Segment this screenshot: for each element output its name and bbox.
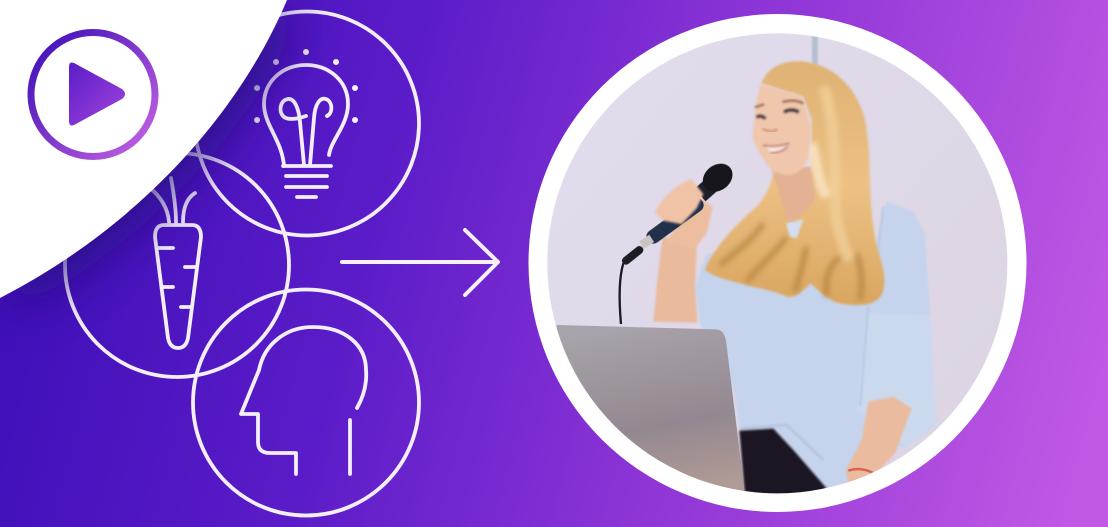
photo frame: white ring bbox=[528, 14, 1026, 512]
icon group: overlapping line circles bbox=[65, 12, 419, 516]
face bbox=[753, 84, 812, 175]
hair bbox=[705, 61, 884, 305]
circle: carrot bbox=[65, 153, 289, 377]
icon: lightbulb bbox=[257, 52, 355, 197]
icon: carrot bbox=[150, 178, 201, 348]
eyes and brows bbox=[755, 101, 803, 119]
circle: lightbulb bbox=[195, 12, 419, 236]
white corner panel bbox=[0, 0, 287, 298]
laptop bbox=[557, 325, 745, 497]
shirt collar bbox=[786, 219, 803, 238]
microphone bbox=[626, 158, 738, 261]
fingers bbox=[655, 179, 703, 224]
raised arm bbox=[653, 237, 697, 323]
icon: play button bbox=[31, 32, 155, 156]
shadow under white corner bbox=[14, 14, 301, 312]
trousers bbox=[739, 429, 827, 497]
shirt bbox=[695, 202, 937, 488]
nose shading bbox=[763, 128, 777, 131]
circle: head bbox=[193, 290, 419, 516]
photo: woman speaking into a microphone behind a laptop bbox=[540, 20, 1020, 500]
wall bbox=[540, 20, 1020, 500]
palm bbox=[667, 198, 714, 248]
neck bbox=[772, 167, 815, 223]
mouth bbox=[763, 143, 789, 153]
microphone cable bbox=[620, 263, 623, 324]
icon: head profile bbox=[241, 327, 366, 474]
arrow bbox=[342, 230, 498, 295]
lower arm and wristband bbox=[846, 397, 912, 485]
wall post bbox=[812, 30, 818, 65]
